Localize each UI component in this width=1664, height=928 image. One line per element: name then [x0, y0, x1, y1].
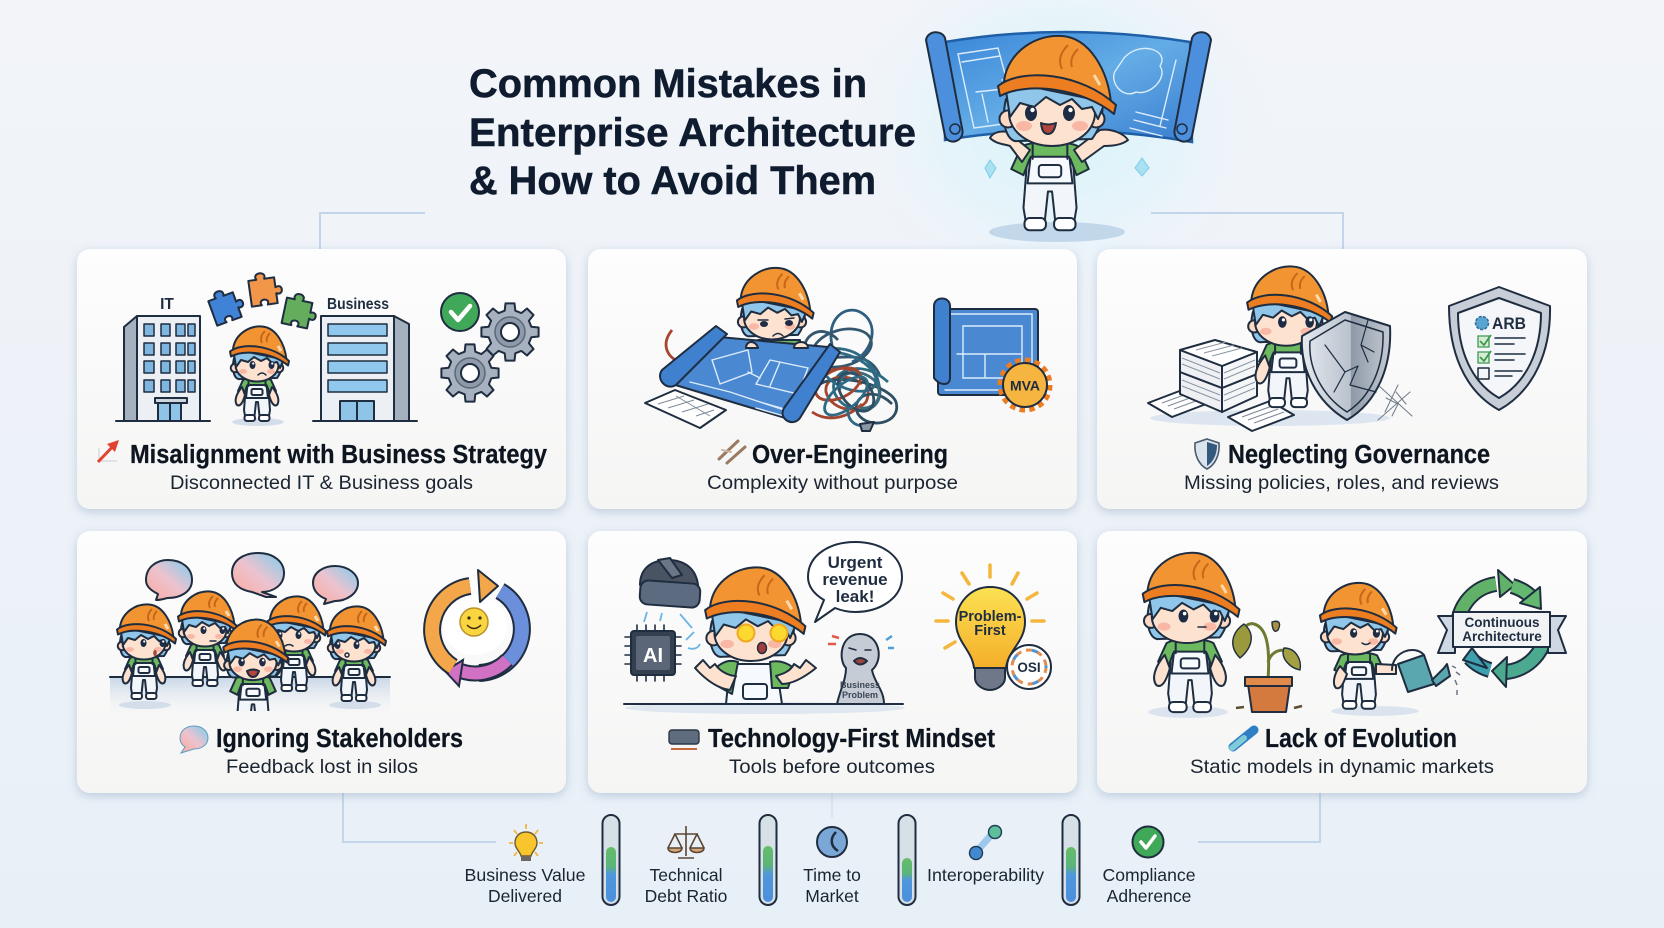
Business building: Business	[327, 296, 389, 313]
gauge 4	[1062, 815, 1080, 905]
architect hiding behind shield	[1247, 266, 1332, 407]
continuous architecture cycle	[1438, 570, 1566, 687]
business problem ghost: Business	[840, 680, 880, 690]
MVA badge: MVA	[1010, 378, 1040, 394]
tech-dazzled architect	[695, 567, 816, 704]
metric: Interoperability	[927, 826, 1044, 885]
heading: Technology-First Mindset	[708, 725, 995, 753]
watering can	[1392, 650, 1460, 695]
problem-first light bulb	[936, 565, 1044, 690]
continuous architecture cycle: Architecture	[1462, 629, 1542, 644]
heading: Misalignment with Business Strategy	[130, 441, 548, 469]
unrolled blueprint	[660, 326, 840, 422]
icon: device	[669, 730, 699, 749]
icon: link	[970, 826, 1002, 860]
VR headset	[639, 558, 701, 649]
stakeholder group	[116, 590, 387, 711]
hero glow	[845, 0, 1275, 300]
subtitle: Disconnected IT & Business goals	[170, 472, 473, 494]
icon: shield	[1195, 439, 1219, 469]
static architect	[1143, 553, 1239, 718]
gauge 2	[760, 815, 776, 905]
subtitle: Complexity without purpose	[707, 472, 958, 494]
card: Over-Engineering	[588, 249, 1077, 509]
connector: bottom left	[343, 793, 496, 842]
heading: Over-Engineering	[752, 441, 948, 469]
metric: Time to Market: Market	[805, 886, 859, 906]
worried architect	[737, 268, 814, 352]
metric: Technical Debt Ratio	[645, 826, 727, 906]
card: Neglecting Governance	[1097, 249, 1587, 509]
connector: bottom right	[1198, 793, 1320, 842]
heading: Ignoring Stakeholders	[216, 725, 463, 753]
title	[469, 62, 916, 203]
subtitle: Missing policies, roles, and reviews	[1184, 472, 1499, 494]
wilted plant	[1233, 621, 1302, 712]
title: & How to Avoid Them	[469, 159, 876, 203]
title: Common Mistakes in	[469, 62, 867, 106]
connector: top left	[320, 213, 425, 249]
gauge 3	[898, 815, 916, 905]
heading: Neglecting Governance	[1228, 441, 1490, 469]
floor line	[624, 702, 905, 714]
paper stacks	[1148, 340, 1390, 431]
icon: scales	[668, 826, 704, 858]
problem-first light bulb: First	[974, 623, 1006, 639]
subtitle: Tools before outcomes	[729, 756, 935, 778]
hero: architect holding blueprint	[926, 32, 1211, 242]
watering architect	[1320, 583, 1419, 716]
IT building: IT	[160, 296, 174, 313]
subtitle: Feedback lost in silos	[226, 756, 418, 778]
metric: Technical Debt Ratio: Technical	[650, 865, 722, 885]
gauge 1	[602, 815, 620, 905]
speech bubble: leak!	[836, 587, 874, 606]
title: Enterprise Architecture	[469, 111, 916, 155]
MVA badge	[1000, 360, 1050, 410]
loose paper	[645, 390, 726, 428]
icon: clock	[817, 827, 847, 857]
card: Technology-First Mindset	[588, 531, 1077, 793]
cobweb	[1378, 385, 1412, 420]
gears	[441, 303, 539, 402]
metric: Business Value Delivered	[464, 824, 586, 906]
AI chip: AI	[643, 645, 663, 667]
business problem ghost	[828, 634, 894, 704]
ARB shield: ARB	[1492, 315, 1526, 333]
icon: link	[1232, 730, 1254, 748]
check badge	[441, 293, 479, 331]
continuous architecture cycle: Continuous	[1465, 615, 1539, 630]
ARB shield	[1449, 287, 1550, 410]
icon: speech bubble	[180, 726, 208, 753]
connector: top right	[1151, 213, 1343, 249]
connector: bottom centre	[831, 793, 833, 818]
metric: Compliance Adherence: Compliance	[1102, 865, 1196, 885]
speech bubbles	[146, 553, 358, 604]
sparkles	[985, 158, 1149, 178]
metric: Interoperability: Interoperability	[927, 865, 1044, 885]
IT building	[116, 296, 210, 421]
heading: Lack of Evolution	[1265, 725, 1457, 753]
metric: Business Value Delivered: Business Value	[464, 865, 586, 885]
metric: Business Value Delivered: Delivered	[488, 886, 562, 906]
subtitle: Static models in dynamic markets	[1190, 756, 1494, 778]
metric: Time to Market: Time to	[803, 865, 861, 885]
Business building	[313, 296, 417, 421]
icon: light bulb	[509, 824, 543, 861]
speech bubble: revenue	[822, 570, 888, 589]
speech bubble	[808, 542, 902, 622]
tangled wires	[666, 310, 897, 431]
cracked shield	[1302, 312, 1390, 420]
metric: Compliance Adherence	[1102, 826, 1196, 906]
speech bubble: Urgent	[828, 553, 883, 572]
metric: Technical Debt Ratio: Debt Ratio	[645, 886, 727, 906]
desk line and floor	[110, 677, 390, 719]
AI chip	[625, 625, 681, 681]
card: Ignoring Stakeholders	[77, 531, 566, 793]
metric: Compliance Adherence: Adherence	[1107, 886, 1191, 906]
icon: tools	[719, 441, 745, 463]
OSI badge: OSI	[1017, 660, 1041, 675]
problem-first light bulb: Problem-	[959, 609, 1022, 625]
card: Misalignment with Business Strategy	[77, 249, 566, 509]
card: Lack of Evolution	[1097, 531, 1587, 793]
puzzle pieces	[206, 271, 320, 330]
icon: red arrow	[97, 440, 119, 462]
OSI badge	[1007, 645, 1051, 689]
feedback loop	[432, 570, 522, 686]
MVA blueprint	[934, 298, 1038, 395]
business problem ghost: Problem	[842, 690, 878, 700]
confused architect	[230, 326, 289, 426]
metric: Time to Market	[803, 827, 861, 906]
blueprint banner	[926, 32, 1211, 142]
icon: check circle	[1132, 826, 1164, 858]
